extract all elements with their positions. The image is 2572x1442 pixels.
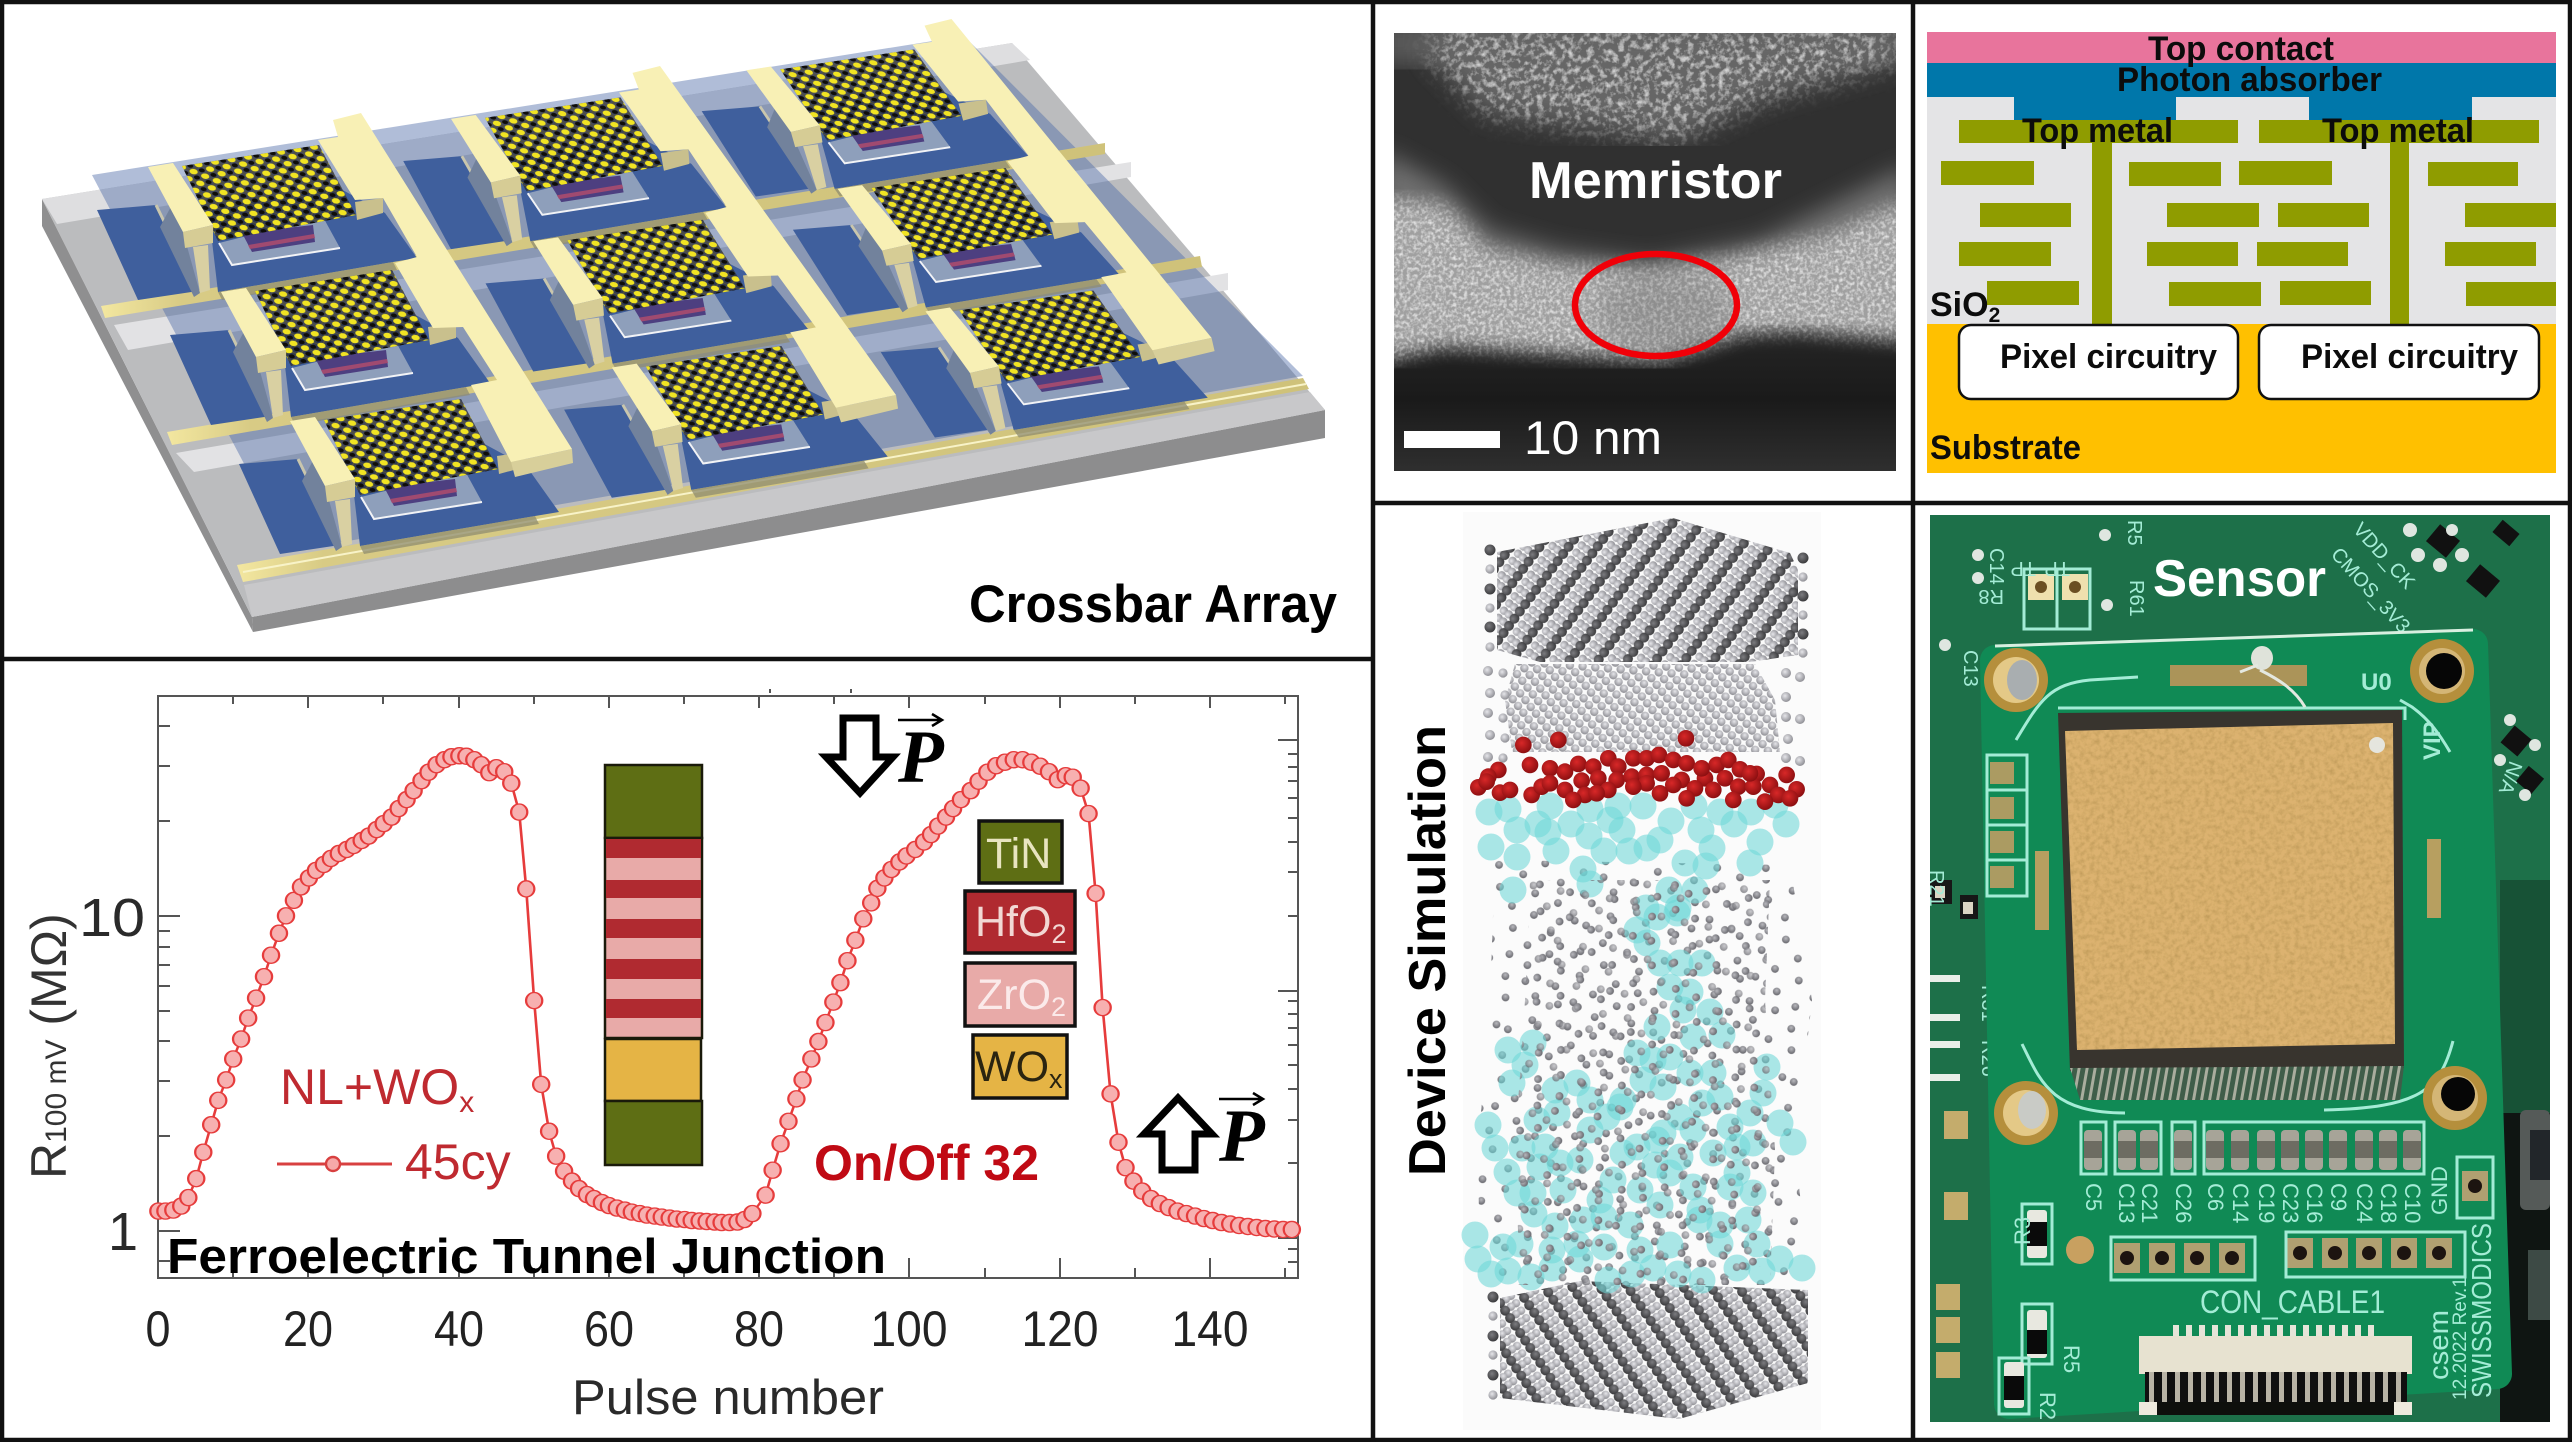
sensor gold surface	[2065, 723, 2395, 1050]
capacitor labels: C26	[2171, 1183, 2196, 1223]
connector and brand labels: R2	[2035, 1392, 2060, 1420]
resistors	[1999, 1204, 2094, 1414]
heading: ferroelectric tunnel junction: Ferroelectric Tunnel Junction	[167, 1230, 886, 1284]
label: memristor: Memristor	[1529, 152, 1782, 210]
gold strips and wire	[2035, 646, 2441, 930]
x axis tick labels	[146, 1301, 1248, 1357]
gray top corners	[1394, 33, 1896, 70]
bottom electrode atoms	[1488, 1281, 1808, 1419]
capacitor labels: GND	[2427, 1166, 2452, 1215]
material labels: HfO	[975, 898, 1051, 946]
scattered gray atoms, inner	[1516, 880, 1775, 1285]
panel: crossbar array	[42, 19, 1337, 634]
pixel diagram labels: Top metal	[2322, 112, 2474, 150]
capacitor labels: C13	[2114, 1183, 2139, 1223]
pixel diagram labels: SiO	[1930, 286, 1989, 324]
heading: device simulation: Device Simulation	[1399, 725, 1457, 1176]
crossbar column 2	[396, 66, 905, 498]
capacitor labels: C19	[2254, 1183, 2279, 1223]
material legend	[965, 821, 1075, 1098]
sensor package frame	[2058, 710, 2404, 1071]
pixel diagram labels: Pixel circuitry	[2000, 338, 2217, 376]
simulation backdrop	[1463, 512, 1821, 1430]
panel: ferroelectric tunnel junction chart	[21, 689, 1298, 1425]
material labels: TiN	[986, 830, 1051, 878]
highlight ellipse	[1575, 254, 1737, 356]
dark right-hand edge	[2500, 880, 2550, 1422]
y axis tick labels: 1	[108, 1202, 138, 1262]
pixel circuitry boxes	[1959, 325, 2539, 399]
carrier silkscreen labels: R5	[2123, 520, 2145, 546]
carrier components	[1930, 520, 2544, 1378]
carrier silkscreen labels: C14	[1985, 548, 2007, 585]
x axis tick labels: 20	[283, 1301, 333, 1357]
x axis title: Pulse number	[572, 1371, 884, 1425]
connector and brand labels: 12.2022 Rev.1	[2450, 1277, 2471, 1400]
top contact layer	[1927, 32, 2556, 63]
gray halo around bright band	[1394, 146, 1896, 325]
y axis tick labels: 10	[79, 888, 145, 948]
SiO2 layer	[1927, 97, 2556, 324]
scattered gray atoms, outer	[1478, 860, 1812, 1285]
x axis tick labels: 60	[584, 1301, 634, 1357]
red atoms interface layer	[1470, 730, 1805, 810]
layer stack	[605, 765, 702, 1165]
carrier silkscreen labels	[1925, 519, 2526, 1077]
x axis tick labels: 140	[1172, 1301, 1248, 1357]
resistance curve	[158, 756, 1292, 1230]
x axis tick labels: 40	[434, 1301, 484, 1357]
panel: pixel stack diagram	[1927, 30, 2556, 473]
photon absorber	[1927, 63, 2556, 120]
panel: device simulation	[1408, 518, 1816, 1419]
arrow: polarization down	[826, 714, 945, 799]
pixel diagram labels	[1930, 30, 2518, 467]
bright board edge	[1995, 630, 2473, 646]
carrier silkscreen labels: TP	[2010, 557, 2036, 579]
metal rails	[101, 143, 1309, 582]
capacitor labels: C24	[2352, 1183, 2377, 1223]
connector and brand labels: VIP	[2419, 721, 2446, 760]
capacitor labels	[2081, 1166, 2452, 1223]
carrier silkscreen labels: R31	[1977, 985, 1999, 1022]
pixel diagram labels: Photon absorber	[2117, 61, 2382, 99]
connector	[2139, 1325, 2412, 1415]
carrier silkscreen labels: C13	[1959, 650, 1981, 687]
carrier board	[1930, 515, 2550, 1422]
crossbar column 1	[97, 113, 573, 554]
arrow: polarization up	[1144, 1093, 1266, 1178]
x axis tick labels: 80	[734, 1301, 784, 1357]
material labels: WO	[975, 1043, 1049, 1091]
capacitor labels: C18	[2376, 1183, 2401, 1223]
carrier silkscreen labels: N/A	[2494, 758, 2526, 798]
material labels: 2	[1051, 992, 1066, 1022]
interface lattice atoms	[1483, 664, 1805, 766]
connector and brand labels: SWISSMODICS	[2466, 1223, 2497, 1398]
capacitor labels: C5	[2081, 1183, 2106, 1211]
connector and brand labels: CON_CABLE1	[2200, 1284, 2385, 1320]
panel: memristor TEM image	[1380, 20, 1910, 475]
metal interconnects	[1941, 120, 2556, 324]
label: sensor: Sensor	[2153, 550, 2326, 608]
board outlines	[1987, 677, 2453, 1113]
arrow: polarization up: P	[1218, 1095, 1266, 1178]
capacitor labels: C6	[2203, 1183, 2228, 1211]
connector and brand labels: R5	[2059, 1345, 2084, 1373]
cyan oxide atoms	[1462, 792, 1816, 1294]
legend text: NL+WOx: x	[459, 1086, 474, 1119]
legend text: NL+WOx: NL+WO	[280, 1059, 459, 1115]
capacitor row	[2081, 1122, 2424, 1174]
x axis tick labels: 120	[1022, 1301, 1098, 1357]
scale bar: 10 nm	[1524, 411, 1662, 464]
connector and brand labels: U0	[2361, 669, 2392, 696]
pixel diagram labels: Top contact	[2148, 30, 2334, 68]
substrate base	[42, 43, 1325, 632]
legend marker: 45cy: 45cy	[405, 1134, 511, 1190]
carrier silkscreen labels: VDD_CK	[2348, 519, 2419, 594]
legend marker: 45cy	[277, 1134, 511, 1190]
capacitor labels: C9	[2326, 1183, 2351, 1211]
material labels: ZrO	[977, 971, 1051, 1019]
y axis title: R100 mV (MΩ)	[21, 913, 77, 1179]
carrier silkscreen labels: TP	[2044, 557, 2070, 579]
chart axes	[158, 689, 1298, 1278]
bright textured band	[1380, 198, 1910, 360]
filament dim area	[1596, 270, 1732, 354]
connector and brand labels	[2010, 669, 2497, 1420]
top electrode atoms	[1484, 518, 1808, 662]
sensor daughter board	[1995, 644, 2497, 1404]
capacitor labels: C16	[2302, 1183, 2327, 1223]
lower dark electrode	[1380, 325, 1910, 475]
connector and brand labels: R3	[2010, 1217, 2035, 1245]
scale bar	[1404, 411, 1662, 464]
annotation: on/off ratio: On/Off 32	[814, 1135, 1039, 1191]
pixel diagram labels: Pixel circuitry	[2301, 338, 2518, 376]
mounting holes	[1984, 639, 2487, 1145]
material labels: 2	[1051, 919, 1066, 949]
upper textured region	[1427, 25, 1900, 140]
carrier silkscreen labels: R26	[1977, 1040, 1999, 1077]
capacitor labels: C23	[2278, 1183, 2303, 1223]
arrow: polarization down: P	[897, 716, 945, 799]
carrier silkscreen labels: R61	[2125, 580, 2147, 617]
carrier silkscreen labels: CMOS_3V3	[2326, 544, 2414, 638]
translucent blue layer	[92, 36, 1303, 551]
carrier silkscreen labels: R21	[1925, 870, 1947, 907]
pixel diagram labels: 2	[1989, 304, 2000, 327]
pixel diagram labels: Top metal	[2022, 112, 2173, 150]
connector and brand labels: csem	[2423, 1310, 2454, 1380]
bond wires	[2070, 1066, 2404, 1100]
pixel diagram labels: Substrate	[1930, 429, 2081, 467]
TEM backdrop	[1394, 33, 1896, 273]
side pads	[1990, 762, 2014, 888]
y axis tick labels	[79, 888, 145, 1262]
crossbar column 3	[687, 19, 1228, 438]
heading: crossbar array: Crossbar Array	[969, 575, 1337, 634]
carrier silkscreen labels: R8	[1978, 585, 2004, 607]
panel: sensor photograph	[1925, 515, 2550, 1422]
material labels	[975, 830, 1066, 1094]
x axis tick labels: 100	[870, 1301, 948, 1357]
material labels: x	[1049, 1064, 1063, 1094]
substrate layer	[1927, 324, 2556, 473]
capacitor labels: C10	[2400, 1183, 2425, 1223]
capacitor labels: C21	[2137, 1183, 2162, 1223]
through-hole pads	[2111, 1157, 2493, 1280]
capacitor labels: C14	[2228, 1183, 2253, 1223]
x axis tick labels: 0	[146, 1301, 170, 1357]
